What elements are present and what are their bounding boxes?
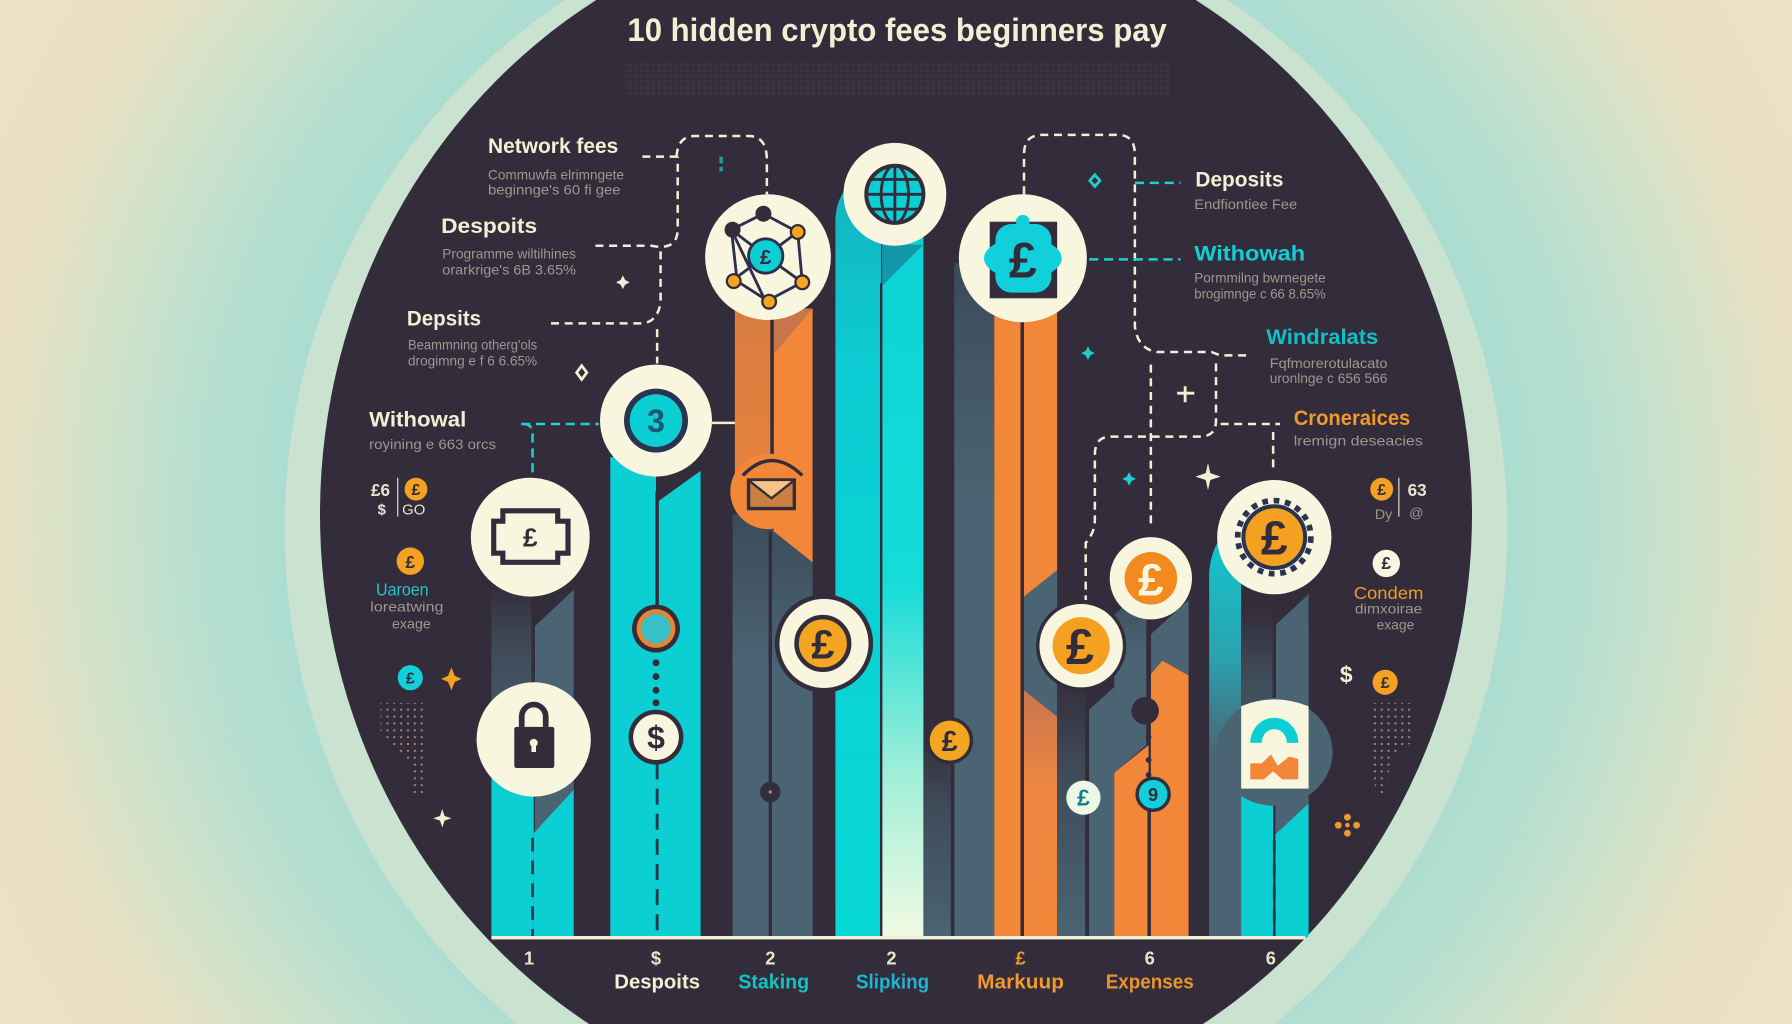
bar 2 <box>610 457 701 937</box>
right mini stat: £ <box>1377 482 1386 499</box>
right dotted texture <box>1369 703 1411 794</box>
right coin callout: Condem <box>1354 583 1423 603</box>
speech bubble icon: envelope <box>730 454 806 529</box>
callout: deposits right: Endfiontiee Fee <box>1194 197 1297 213</box>
icon: network nodes: £ <box>760 246 772 269</box>
connector lines <box>521 135 1280 600</box>
callout: windralats: Fqfmorerotulacato <box>1270 356 1387 372</box>
left mini stat: £ <box>412 482 421 499</box>
teal sparkle 2 <box>1122 472 1136 486</box>
icon: small pound coin <box>928 719 971 762</box>
icon: teal coin <box>600 365 712 477</box>
axis labels: Slipking <box>856 971 929 994</box>
bar 6 <box>1057 585 1189 937</box>
callout: deposits 1: Despoits <box>441 213 537 238</box>
left mini stat: GO <box>402 502 425 518</box>
axis labels: 6 <box>1145 948 1155 969</box>
dark central disc <box>320 0 1472 1024</box>
sparkle white <box>616 275 630 289</box>
callout: windralats: uronlnge c 656 566 <box>1270 371 1387 387</box>
icon: ticket pound <box>959 194 1087 322</box>
callout: withdrawal right: Pormmilng bwrnegete <box>1194 270 1326 286</box>
icon: pale pound coin: £ <box>1077 785 1090 811</box>
sparkle white left <box>433 809 451 827</box>
bar 4 <box>835 183 923 937</box>
icon: pound coin bar 6: £ <box>1138 554 1164 605</box>
right coin callout <box>1354 550 1423 634</box>
left coin callout: exage <box>392 617 431 633</box>
callout: network fees: Network fees <box>488 133 618 158</box>
right mini stat: 63 <box>1408 480 1427 500</box>
outer mint ring <box>285 0 1507 1024</box>
right orange coin <box>1373 670 1398 695</box>
callout: deposits 1 <box>441 213 576 278</box>
subtitle placeholder texture <box>625 63 1170 98</box>
left coin callout <box>370 547 443 633</box>
icon: pound coin bar 6 <box>1110 537 1192 619</box>
axis labels: Staking <box>738 971 809 994</box>
callout: network fees <box>488 133 624 198</box>
callout: withdrawal right: brogimnge c 66 8.65% <box>1194 286 1326 302</box>
sparkle orange left <box>441 667 462 690</box>
axis labels: $ <box>651 948 661 969</box>
left mini stat: £6 <box>371 480 390 500</box>
callout: deposits 1: orarkrige's 6B 3.65% <box>442 262 576 278</box>
callout: deposits right: Deposits <box>1195 166 1283 191</box>
callout: croneraices <box>1294 405 1423 450</box>
right orange coin: £ <box>1381 675 1390 692</box>
left coin callout: loreatwing <box>370 599 443 615</box>
left dotted texture <box>381 703 425 794</box>
callout: withdrawal right: Withowah <box>1194 241 1305 266</box>
icon: teal small coin <box>1137 778 1169 810</box>
axis labels: 2 <box>765 948 775 969</box>
callout: deposits 1: Programme wiltilhines <box>442 246 576 262</box>
icon: pound coin centre-left: £ <box>811 621 834 667</box>
icon: network nodes <box>705 194 831 320</box>
callout: windralats <box>1266 324 1387 387</box>
white dollar mark: $ <box>1340 661 1353 687</box>
orange sparkle right <box>1335 814 1360 837</box>
axis labels: 1 <box>524 948 534 969</box>
axis labels: Despoits <box>614 971 700 994</box>
callout: croneraices: lremign deseacies <box>1294 434 1423 450</box>
callout: windralats: Windralats <box>1266 324 1378 349</box>
callout: withdrawal: Withowal <box>369 406 466 431</box>
icon: pound coin bar 5 <box>1038 602 1125 689</box>
icon: teal coin: 3 <box>647 403 665 439</box>
white cross <box>1177 386 1194 402</box>
teal sparkle <box>1081 346 1095 360</box>
axis labels: Markuup <box>977 971 1064 994</box>
axis labels: 6 <box>1266 948 1276 969</box>
bar 5 <box>923 263 1057 937</box>
white compass cross <box>1195 463 1221 490</box>
icon: shield badge <box>1216 698 1333 806</box>
icon: teal small coin: 9 <box>1148 784 1158 805</box>
right mini stat: Dy <box>1375 507 1393 523</box>
callout: deposits 2 <box>407 306 537 370</box>
icon: pound coin bar 5: £ <box>1066 618 1094 675</box>
icon: gear pound coin <box>1217 480 1331 594</box>
left mini stat: $ <box>378 502 387 518</box>
axis labels: £ <box>1015 948 1026 969</box>
bar 1 <box>491 583 574 937</box>
bar 7 <box>1209 535 1309 937</box>
axis labels <box>524 948 1276 994</box>
axis labels: Expenses <box>1106 971 1194 994</box>
callout: network fees: beginnge's 60 fi gee <box>488 182 621 198</box>
icon: pale pound coin <box>1066 781 1101 815</box>
callout: network fees: Commuwfa elrimngete <box>488 167 624 183</box>
teal marks <box>720 157 723 171</box>
right coin callout: exage <box>1377 618 1414 634</box>
icon: banknote <box>471 478 590 597</box>
right mini stat <box>1370 478 1427 523</box>
chart baseline <box>491 936 1305 939</box>
callout: withdrawal right <box>1194 241 1326 302</box>
icon: banknote: £ <box>523 522 538 552</box>
left teal coin <box>398 665 423 690</box>
callout: deposits 2: Depsits <box>407 306 481 331</box>
axis labels: 2 <box>886 948 897 969</box>
bar chart <box>491 183 1309 939</box>
left mini stat <box>371 478 427 518</box>
callout: withdrawal <box>369 406 496 453</box>
left teal coin: £ <box>406 670 415 687</box>
diamond white <box>575 363 589 382</box>
icon: dollar coin: $ <box>647 720 665 756</box>
title: 10 hidden crypto fees beginners pay <box>627 12 1167 48</box>
bar 3 <box>733 309 813 937</box>
icon: pound coin centre-left <box>777 597 871 690</box>
callout: croneraices: Croneraices <box>1294 405 1410 430</box>
callout: deposits 2: Beammning otherg'ols <box>408 338 537 354</box>
icon: gear pound coin: £ <box>1261 512 1288 565</box>
callout: deposits 2: drogimng e f 6 6.65% <box>408 354 537 370</box>
right coin callout: £ <box>1382 553 1392 573</box>
right mini stat: @ <box>1409 506 1424 522</box>
right coin callout: dimxoirae <box>1355 602 1422 618</box>
callout: withdrawal: royining e 663 orcs <box>369 437 496 453</box>
icon: small pound coin: £ <box>942 726 958 758</box>
callout: deposits right <box>1194 166 1297 213</box>
left coin callout: Uaroen <box>376 579 429 599</box>
icon: ring node <box>632 605 680 653</box>
icon: globe <box>843 143 946 246</box>
icon: dollar coin <box>631 712 681 762</box>
icon: ticket pound: £ <box>1009 232 1037 289</box>
left coin callout: £ <box>406 552 416 572</box>
icon: padlock <box>477 682 591 797</box>
teal diamond <box>1088 173 1102 189</box>
